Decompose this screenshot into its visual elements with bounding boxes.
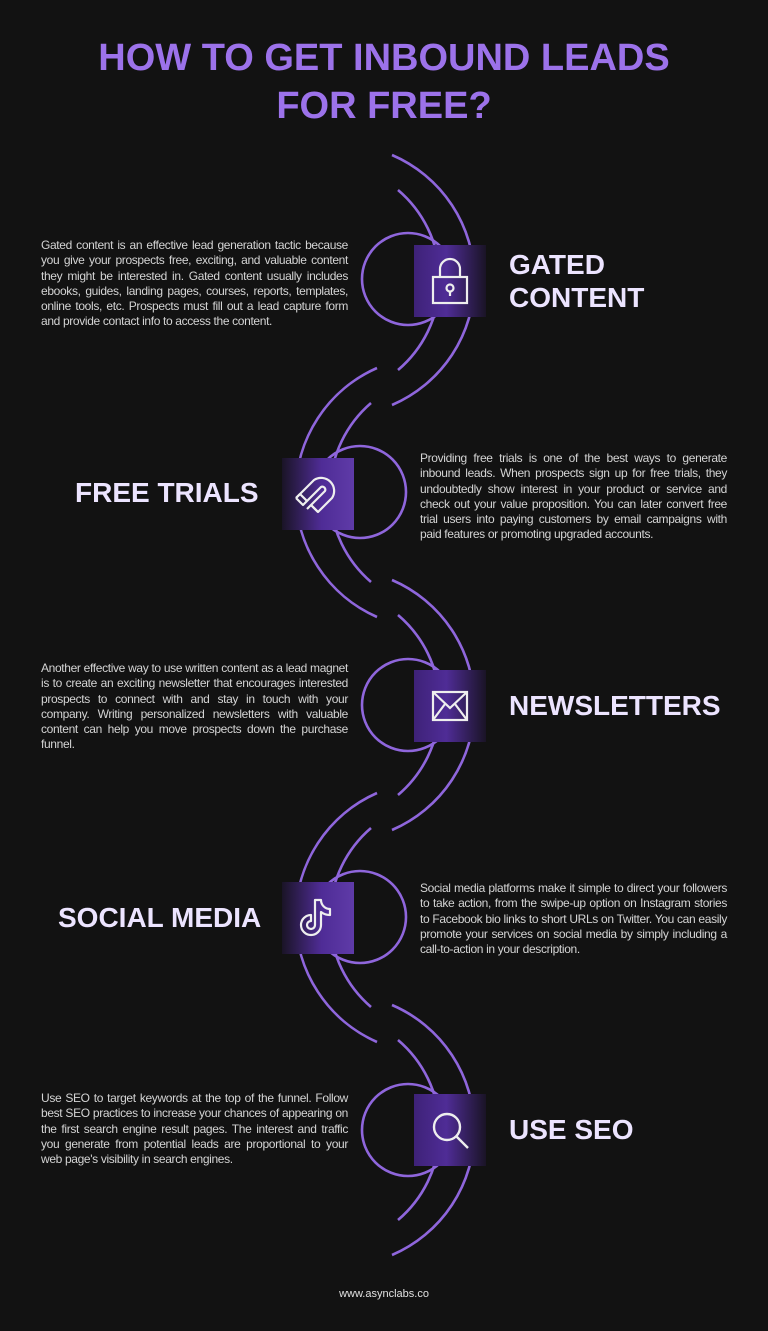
icon box: search (414, 1094, 486, 1166)
item: free trials (75, 451, 728, 541)
heading: gated content: GATED (509, 249, 605, 280)
heading: newsletters: NEWSLETTERS (509, 690, 721, 721)
text: newsletters: Another effective way to use written content as a lead magnet is to create an exciting newsletter that encourages interested prospects to connect with and stay in touch with your company. Writing personalized newsletters with valuable content can help you move prospects down the purchase funnel. (41, 661, 348, 751)
footer url: www.asynclabs.co (339, 1288, 429, 1300)
icon box: magnet (282, 458, 354, 530)
title: FOR FREE? (276, 85, 492, 127)
item: use seo (41, 1091, 633, 1166)
text: free trials: Providing free trials is one of the best ways to generate inbound leads. When prospects sign up for free trials, they undoubtedly show interest in your product or service and check out your value proposition. You can later convert free trial users into paying customers by email campaigns with paid features or promoting upgraded accounts. (420, 451, 727, 541)
heading: gated content (509, 249, 644, 313)
heading: gated content: CONTENT (509, 282, 644, 313)
text: gated content: Gated content is an effective lead generation tactic because you give your prospects free, exciting, and valuable content they might be interested in. Gated content usually includes ebooks, guides, landing pages, courses, reports, templates, online tools, etc. Prospects must fill out a lead capture form and provide contact info to access the content. (41, 238, 348, 328)
title: HOW TO GET INBOUND LEADS (98, 37, 670, 79)
heading: social media: SOCIAL MEDIA (58, 902, 261, 933)
icon box: lock (414, 245, 486, 317)
item: newsletters (41, 661, 721, 751)
title (98, 37, 670, 127)
heading: use seo: USE SEO (509, 1114, 633, 1145)
text: social media: Social media platforms make it simple to direct your followers to take action, from the swipe-up option on Instagram stories to Facebook bio links to short URLs on Twitter. You can easily promote your services on social media by simply including a call-to-action in your description. (420, 881, 727, 956)
icon box: envelope (414, 670, 486, 742)
item: social media (58, 881, 728, 956)
heading: free trials: FREE TRIALS (75, 477, 259, 508)
icon box: tiktok (282, 882, 354, 954)
item: gated content (41, 238, 644, 328)
text: use seo: Use SEO to target keywords at the top of the funnel. Follow best SEO practices to increase your chances of appearing on the first search engine result pages. The interest and traffic you generate from potential leads are proportional to your web page's visibility in search engines. (41, 1091, 348, 1166)
